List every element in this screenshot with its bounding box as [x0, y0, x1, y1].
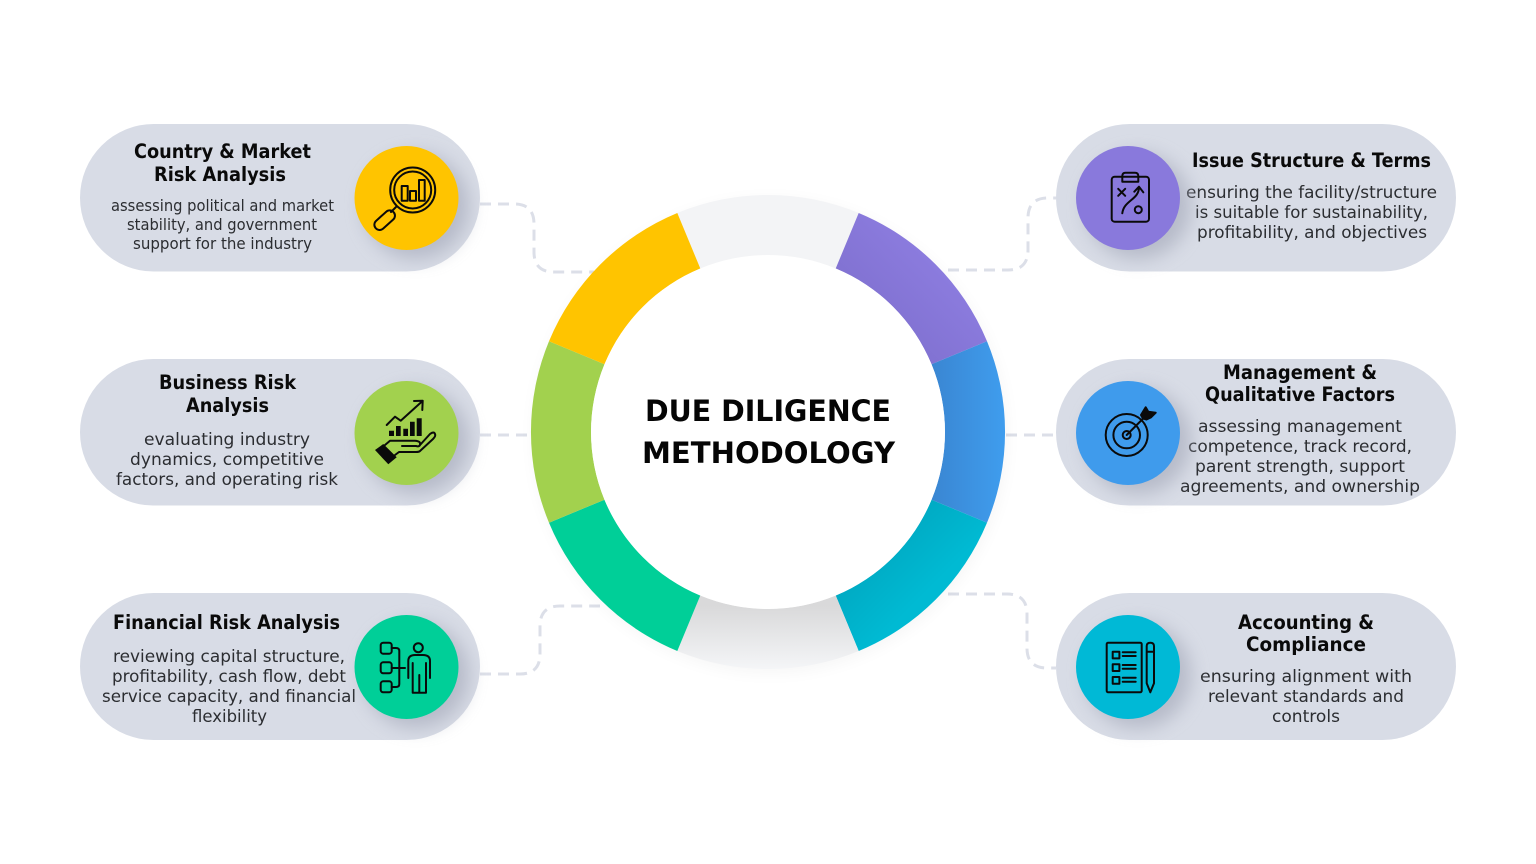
description [1186, 183, 1437, 243]
ring segment: teal [836, 500, 987, 651]
description: service capacity, and financial [102, 687, 356, 707]
description [102, 647, 356, 727]
description: stability, and government [127, 215, 317, 234]
heading: Financial Risk Analysis [113, 611, 340, 634]
heading: Risk Analysis [154, 163, 286, 186]
ring segment: blue [932, 341, 1005, 523]
description: parent strength, support [1195, 457, 1405, 477]
description: profitability, and objectives [1197, 223, 1427, 243]
ring segment: bottom grey [677, 596, 859, 669]
panel: Issue Structure & Terms [1056, 124, 1456, 272]
description: factors, and operating risk [116, 470, 338, 490]
pill background [80, 124, 480, 272]
heading [1238, 611, 1374, 656]
center title: METHODOLOGY [642, 436, 896, 470]
description: competence, track record, [1188, 437, 1412, 457]
center white disc [591, 255, 945, 609]
central ring [531, 195, 1007, 673]
icon: magnifying glass with bars [354, 146, 469, 259]
description [111, 196, 334, 253]
center title: DUE DILIGENCE [645, 394, 891, 428]
pill background [80, 359, 480, 506]
heading: Business Risk [159, 371, 297, 394]
ring segment: top grey [677, 195, 859, 268]
heading: Management & [1223, 361, 1377, 384]
icon: hand holding growth chart [354, 381, 469, 494]
icon: target with dart [1076, 381, 1191, 494]
panel: Country & Market Risk Analysis [80, 124, 480, 272]
description: flexibility [192, 707, 267, 727]
description: evaluating industry [144, 430, 310, 450]
icon: clipboard game plan [1076, 146, 1191, 259]
heading: Accounting & [1238, 611, 1374, 634]
description: ensuring the facility/structure [1186, 183, 1437, 203]
pill background [80, 593, 480, 740]
heading: Issue Structure & Terms [1192, 149, 1431, 172]
connector lines [480, 198, 1056, 674]
heading [159, 371, 297, 417]
panel: Business Risk Analysis [80, 359, 480, 506]
heading: Country & Market [134, 140, 311, 163]
description: profitability, cash flow, debt [112, 667, 346, 687]
description: ensuring alignment with [1200, 667, 1412, 687]
center title [642, 394, 896, 470]
panel: Financial Risk Analysis [80, 593, 480, 740]
description: assessing management [1198, 417, 1402, 437]
ring segment: purple [836, 213, 987, 364]
heading [134, 140, 311, 186]
heading: Compliance [1246, 633, 1366, 656]
ring segment: lime [531, 341, 604, 523]
heading: Qualitative Factors [1205, 383, 1395, 406]
description: agreements, and ownership [1180, 477, 1420, 497]
description: relevant standards and [1208, 687, 1404, 707]
description: support for the industry [133, 234, 312, 253]
description: reviewing capital structure, [113, 647, 345, 667]
ring segment: green [549, 500, 700, 651]
panel: Management & Qualitative Factors [1056, 359, 1456, 506]
icon: checklist and pencil [1076, 615, 1191, 728]
description: is suitable for sustainability, [1195, 203, 1428, 223]
ring segment: yellow [549, 213, 700, 364]
pill background [1056, 124, 1456, 272]
description [1180, 417, 1420, 497]
panel: Accounting & Compliance [1056, 593, 1456, 740]
description: dynamics, competitive [130, 450, 324, 470]
heading [1205, 361, 1395, 406]
icon: org structure and person [354, 615, 469, 728]
pill background [1056, 593, 1456, 740]
description [1200, 667, 1412, 727]
description: assessing political and market [111, 196, 334, 215]
description: controls [1272, 707, 1340, 727]
description [116, 430, 338, 490]
heading: Analysis [186, 394, 269, 417]
pill background [1056, 359, 1456, 506]
